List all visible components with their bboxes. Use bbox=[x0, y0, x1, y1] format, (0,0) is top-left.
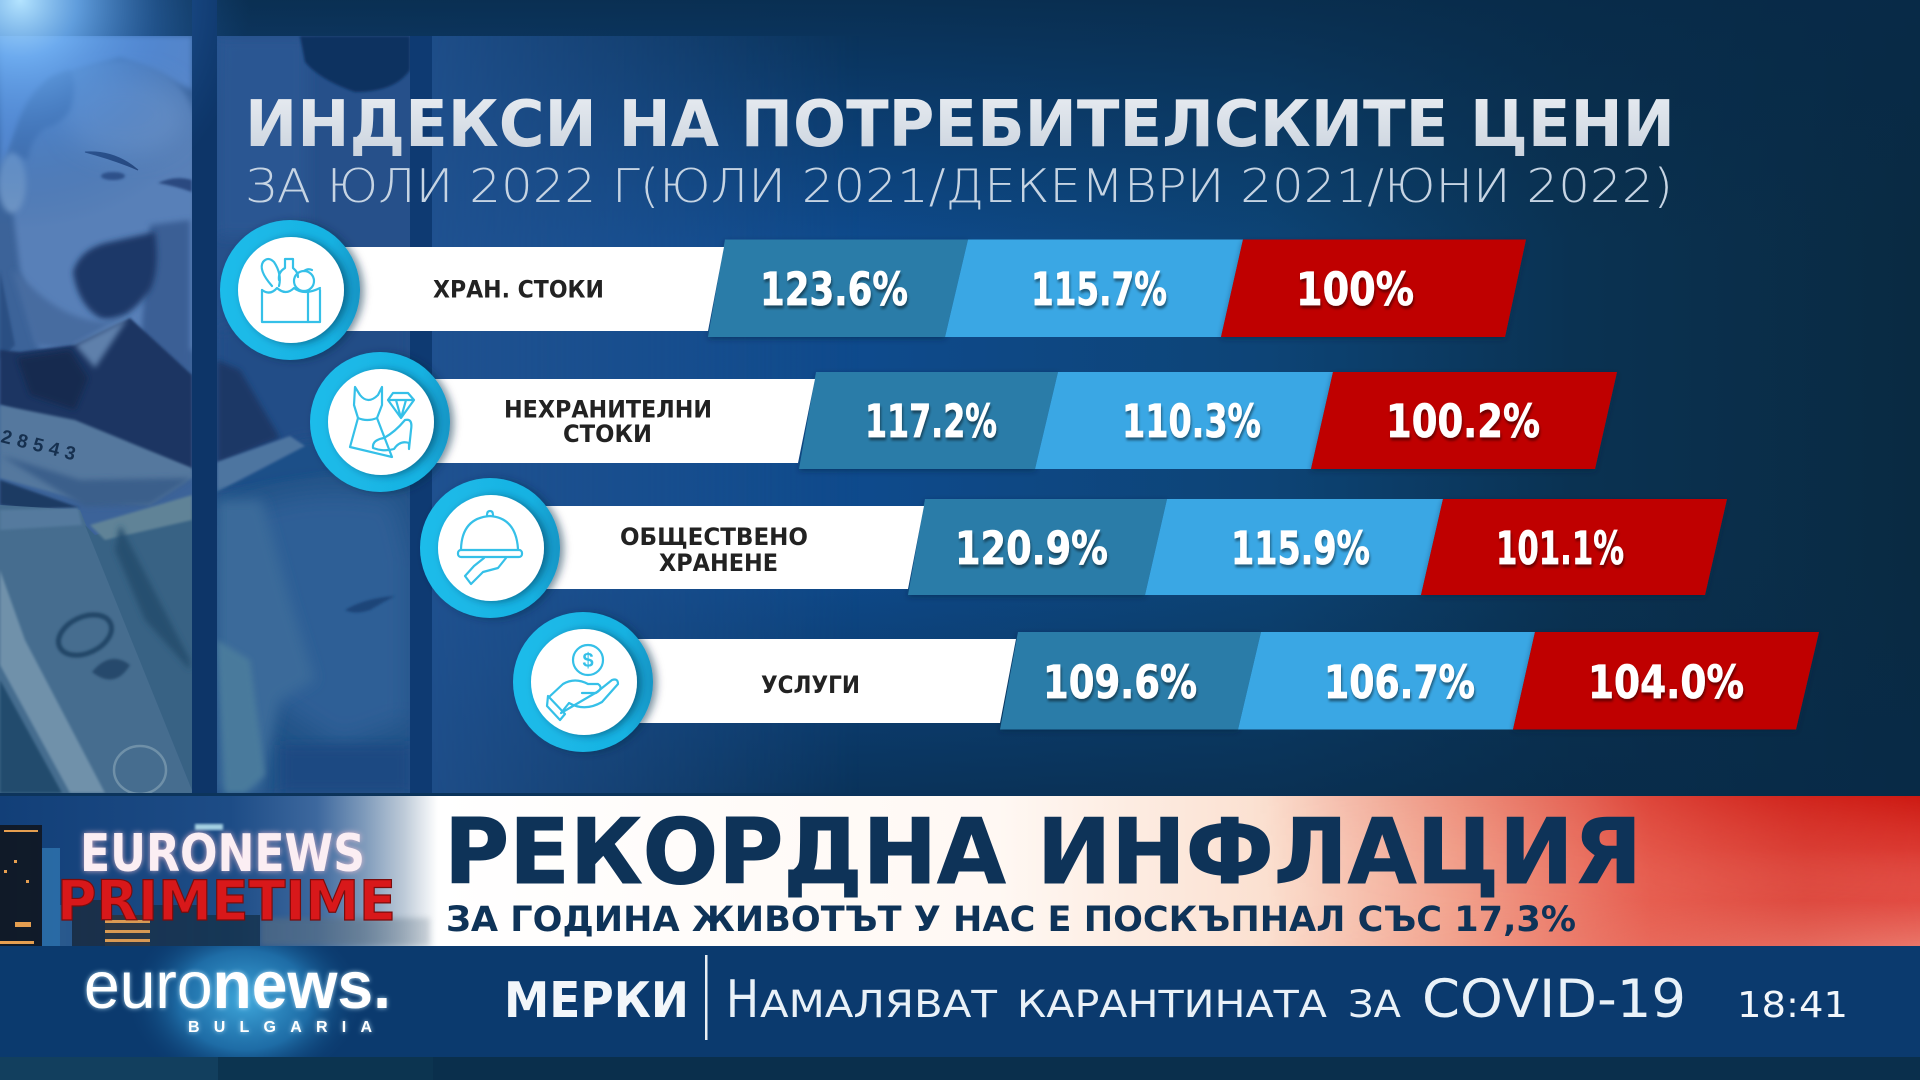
segment: June 2022: 101.1% bbox=[1496, 522, 1624, 575]
segment: July 2021: 120.9% bbox=[955, 522, 1108, 575]
icon: serving cloche bbox=[420, 478, 560, 618]
label bar: НЕХРАНИТЕЛНИ bbox=[504, 396, 712, 424]
label bar: ХРАНЕНЕ bbox=[659, 549, 778, 577]
label bar bbox=[540, 506, 924, 589]
ticker label: МЕРКИ bbox=[504, 972, 689, 1029]
panel: ticker bar bbox=[0, 946, 1920, 1057]
label bar bbox=[430, 379, 815, 463]
bottom strip bbox=[0, 1057, 1920, 1080]
icon: hand with coin: $ bbox=[582, 650, 594, 672]
subheadline: ЗА ГОДИНА ЖИВОТЪТ У НАС Е ПОСКЪПНАЛ СЪС 17,3% bbox=[446, 900, 1576, 940]
logo: euronews bulgaria: euronews. bbox=[84, 948, 391, 1023]
banknote photo collage bbox=[0, 0, 862, 794]
label bar: ХРАН. СТОКИ bbox=[433, 276, 604, 304]
icon: dress, diamond, shoe bbox=[310, 352, 450, 492]
ticker text: ЗА bbox=[1348, 983, 1401, 1026]
segment: July 2021 bbox=[799, 372, 1058, 469]
banknote serial number: 28543 bbox=[0, 426, 78, 465]
segment: July 2021: 123.6% bbox=[760, 263, 908, 316]
logo: euronews primetime bbox=[57, 824, 396, 933]
row: хран. стоки bbox=[220, 220, 1526, 360]
logo: euronews primetime: PRIMETIME bbox=[57, 869, 396, 933]
segment: December 2021 bbox=[1035, 372, 1333, 469]
label bar: СТОКИ bbox=[563, 420, 652, 448]
segment: July 2021 bbox=[708, 240, 968, 337]
row: обществено хранене bbox=[420, 478, 1727, 618]
segment: June 2022: 104.0% bbox=[1588, 656, 1744, 709]
city skyline bbox=[0, 824, 430, 946]
icon: hand with coin bbox=[513, 612, 653, 752]
segment: December 2021: 115.9% bbox=[1231, 522, 1370, 575]
label bar bbox=[340, 247, 724, 331]
segment: June 2022: 100% bbox=[1296, 263, 1414, 316]
clock: 18:41 bbox=[1737, 985, 1848, 1026]
label bar: УСЛУГИ bbox=[761, 671, 860, 699]
segment: June 2022 bbox=[1513, 632, 1819, 730]
segment: July 2021 bbox=[908, 499, 1167, 595]
segment: December 2021 bbox=[1238, 632, 1535, 730]
segment: July 2021 bbox=[1000, 632, 1261, 730]
row: нехранителни стоки bbox=[310, 352, 1617, 492]
ticker text bbox=[726, 969, 1686, 1030]
ticker text: COVID-19 bbox=[1422, 969, 1686, 1030]
segment: July 2021: 117.2% bbox=[865, 395, 997, 448]
ticker text: КАРАНТИНАТА bbox=[1017, 983, 1327, 1026]
segment: June 2022 bbox=[1421, 499, 1727, 595]
segment: June 2022 bbox=[1221, 240, 1526, 337]
label bar: ОБЩЕСТВЕНО bbox=[620, 523, 808, 551]
row: услуги bbox=[513, 612, 1819, 752]
icon: grocery bag bbox=[220, 220, 360, 360]
subtitle: ЗА ЮЛИ 2022 Г(ЮЛИ 2021/ДЕКЕМВРИ 2021/ЮНИ 2022) bbox=[245, 159, 1673, 213]
panel: banknote portrait left bbox=[0, 36, 195, 794]
panel: banknote portrait right bbox=[432, 36, 778, 793]
panel: headline banner bbox=[0, 796, 1920, 946]
headline: РЕКОРДНА ИНФЛАЦИЯ bbox=[444, 800, 1642, 905]
segment: December 2021 bbox=[945, 240, 1243, 337]
segment: December 2021 bbox=[1145, 499, 1443, 595]
corner glow bbox=[0, 0, 300, 260]
segment: December 2021: 115.7% bbox=[1031, 263, 1167, 316]
segment: June 2022: 100.2% bbox=[1386, 395, 1540, 448]
panel: banknote portrait middle bbox=[217, 36, 410, 793]
segment: July 2021: 109.6% bbox=[1043, 656, 1197, 709]
logo: euronews primetime: EURONEWS bbox=[80, 824, 365, 884]
segment: December 2021: 106.7% bbox=[1324, 656, 1475, 709]
segment: June 2022 bbox=[1311, 372, 1617, 469]
logo: euronews bulgaria: BULGARIA bbox=[188, 1019, 372, 1036]
ticker text: Н bbox=[726, 970, 759, 1030]
label bar bbox=[630, 639, 1016, 723]
ticker text: АМАЛЯВАТ bbox=[760, 983, 997, 1026]
title: ИНДЕКСИ НА ПОТРЕБИТЕЛСКИТЕ ЦЕНИ bbox=[245, 88, 1675, 162]
segment: December 2021: 110.3% bbox=[1122, 395, 1261, 448]
